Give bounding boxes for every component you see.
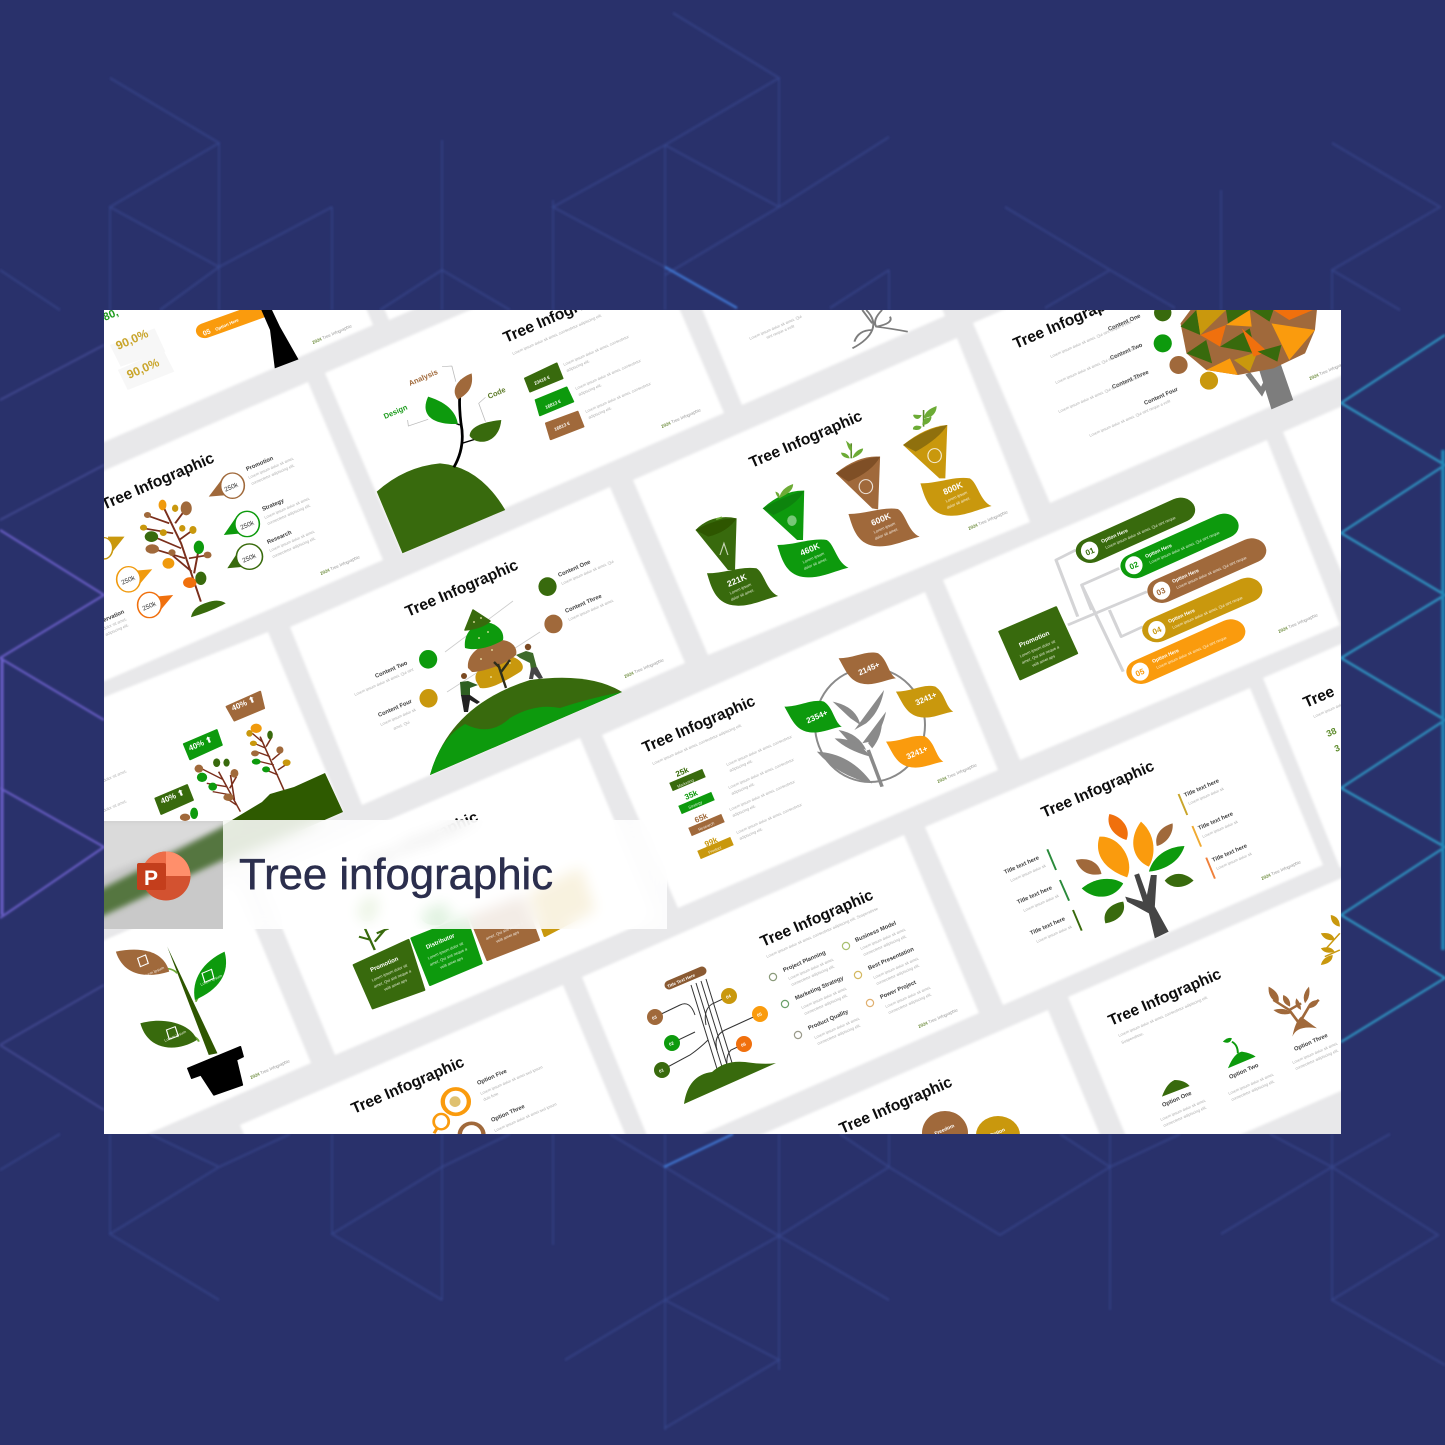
slide: small plants growing with 40% tags: 40% ⬆ <box>159 788 186 806</box>
slide: tree diagram and checklist: 02 <box>668 1040 675 1047</box>
slide: small plants growing with 40% tags: 40% ⬆ <box>187 735 214 753</box>
slide: branching tree with 250k pins: 250k <box>121 574 137 587</box>
slide: tree diagram and checklist: Best Presentation <box>867 946 915 972</box>
slide: circular leaves around a grey plant: Lorem ipsum dolor sit amet, consectetur adipiscing elit. <box>651 722 743 766</box>
slide: two people and tree on a globe: Content Two <box>374 660 409 680</box>
slide: colourful leaf tree: Title text here <box>1003 855 1041 876</box>
slide: promotion flow with five option pills: Lorem ipsum dolor sit <box>1019 638 1057 659</box>
slide: potted plant with three leaves: Lorem Ipsum <box>199 973 223 987</box>
slide: promotion flow with five option pills: 03 <box>1155 586 1167 598</box>
slide: percentage cards and black trunk: 90,0% <box>125 355 162 382</box>
slide: circular leaves around a grey plant: 25k <box>674 765 691 779</box>
slide: low-poly tree with four contents <box>1011 289 1350 438</box>
icon: PowerPoint logo: P <box>144 867 158 890</box>
slide: circular leaves around a grey plant: adipiscing elit. <box>728 758 753 773</box>
slide: promotion and distributor tiles: velit amet aps <box>495 929 520 944</box>
slide: two people and tree on a globe: Content Three <box>564 593 604 615</box>
slide: sapling on a hill: Lorem ipsum dolor sit amet, consectetur <box>574 358 642 391</box>
slide: three stages of plant growth: Lorem ipsum dolor sit amet, <box>1291 1041 1339 1065</box>
slide: tree diagram and checklist: Lorem ipsum dolor sit amet, <box>884 985 932 1009</box>
slide: colourful leaf tree: Lorem ipsum dolor sit <box>1201 819 1239 839</box>
slide: tree diagram and checklist: Product Quality <box>807 1009 850 1032</box>
slide: branching tree with 250k pins: consectetur adipiscing elit. <box>250 463 295 486</box>
slide: low-poly tree with four contents: 2024 Tree Infographic <box>1308 359 1350 381</box>
slide: colourful leaf tree: Lorem ipsum dolor sit <box>1187 786 1225 806</box>
slide: colourful leaf tree: Tree Infographic <box>1039 758 1157 822</box>
slide: colourful leaf tree: Title text here <box>1029 916 1067 937</box>
slide: promotion flow with five option pills: Lorem ipsum dolor sit amet. Qui sint neque <box>1104 515 1177 550</box>
slide: funnels with growing sprouts: Lorem ipsum <box>945 489 969 504</box>
slide: sapling on a hill: 23416 € <box>533 375 551 386</box>
slide: promotion and distributor tiles: Lorem ipsum dolor sit <box>371 962 409 983</box>
slide: colourful leaf tree: Lorem ipsum dolor sit <box>1022 893 1060 913</box>
slide: circular leaves around a grey plant: 99k <box>703 835 720 849</box>
slide: linked option circles: Lorem ipsum dolor sit amet sed ipsum <box>479 1064 544 1096</box>
slide: promotion and distributor tiles: amet. Qui sint neque a <box>485 920 525 941</box>
slide: low-poly tree with four contents: Content Four <box>1143 387 1180 407</box>
slide: tree diagram and checklist: Lorem ipsum dolor sit amet, consectetur adipiscing elit. Suspendisse <box>765 906 879 959</box>
slide: circular leaves around a grey plant: 65k <box>693 811 710 825</box>
slide: promotion flow with five option pills: 2024 Tree Infographic <box>1277 612 1319 634</box>
banner: title: Tree infographic <box>239 850 553 899</box>
slide: partial slide at right edge: 38 <box>1325 726 1338 739</box>
slide: tree diagram and checklist: consectetur adipiscing elit. <box>875 963 920 986</box>
slide: potted plant with three leaves: Lorem Ipsum <box>141 965 165 979</box>
slide: circular leaves around a grey plant: Lorem ipsum dolor sit amet, consectetur <box>725 734 793 767</box>
blurred backdrop <box>104 821 223 929</box>
slide: tree diagram and checklist: 2024 Tree Infographic <box>917 1007 959 1029</box>
slide: circular leaves around a grey plant: Marketing <box>676 777 695 789</box>
slide: colourful leaf tree: Lorem ipsum dolor sit <box>1009 863 1047 883</box>
slide: circular leaves around a grey plant: 2145+ <box>857 660 881 677</box>
slide: tree diagram and checklist: Lorem ipsum dolor sit amet, <box>787 957 835 981</box>
slide: colourful leaf tree: Lorem ipsum dolor sit <box>1215 851 1253 871</box>
slide: promotion flow with five option pills <box>999 510 1319 681</box>
slide: colourful leaf tree: Lorem ipsum dolor sit <box>1035 924 1073 944</box>
slide: promotion and distributor tiles: amet. Qui sint neque a <box>429 946 469 967</box>
slide: colourful leaf tree: Title text here <box>1197 811 1235 832</box>
slide: funnels with growing sprouts: 600K <box>869 510 893 528</box>
slide: promotion flow with five option pills: Lorem ipsum dolor sit amet. Qui sint neque <box>1175 555 1248 590</box>
slide: promotion flow with five option pills: 01 <box>1084 546 1096 558</box>
slide: three stages of plant growth: Lorem ipsum dolor sit amet, <box>1227 1072 1275 1096</box>
slide: tree diagram and checklist: Lorem ipsum dolor sit amet, <box>859 927 907 951</box>
slide: tree diagram and checklist: Lorem ipsum dolor sit amet, <box>813 1016 861 1040</box>
slide: sapling on a hill: Design <box>382 402 409 421</box>
slide: sapling on a hill: adipiscing elit. <box>577 382 602 397</box>
panel: slide collage <box>104 310 1341 1134</box>
slide: branching tree with 250k pins <box>95 450 361 637</box>
slide: partial slide at right edge: 3 <box>1333 743 1341 754</box>
slide: tree diagram and checklist: Power Project <box>879 980 917 1001</box>
slide: percentage cards and black trunk: 05 <box>202 328 212 338</box>
slide: small plants growing with 40% tags: 40% ⬆ <box>230 695 257 713</box>
slide: roots illustration: Lorem ipsum dolor sit amet. Qui <box>748 314 802 341</box>
slide: three stages of plant growth: Option Three <box>1293 1033 1330 1053</box>
slide: circular leaves around a grey plant: adipiscing elit. <box>730 781 755 796</box>
slide: circular leaves around a grey plant: 2024 Tree Infographic <box>936 762 978 784</box>
slide: funnels with growing sprouts: dolor sit amet. <box>803 556 828 571</box>
slide: branching tree with 250k pins: consectetur adipiscing elit. <box>266 503 311 526</box>
slide: promotion and distributor tiles: Promotion <box>370 956 400 974</box>
slide: sapling on a hill: Lorem ipsum dolor sit amet, consectetur adipiscing elit. <box>511 312 603 356</box>
slide: sapling on a hill: 16813 € <box>544 399 562 410</box>
slide: promotion flow with five option pills: Lorem ipsum dolor sit amet. Qui sint neque <box>1148 530 1221 565</box>
slide: tree diagram and checklist: 06 <box>740 1041 747 1048</box>
slide: promotion flow with five option pills: Promotion <box>1018 630 1051 649</box>
slide: promotion flow with five option pills: Option Here <box>1144 543 1173 560</box>
slide: tree diagram and checklist <box>647 887 959 1104</box>
slide: circular leaves around a grey plant: Strategy <box>687 799 703 810</box>
slide: circular leaves around a grey plant <box>640 463 978 855</box>
slide: three stages of plant growth: consectetur adipiscing elit. <box>1162 1105 1207 1128</box>
slide: potted plant with three leaves: 2024 Tree Infographic <box>249 1058 291 1080</box>
slide: colourful leaf tree: Title text here <box>1211 843 1249 864</box>
slide: three stages of plant growth: Suspendisse. <box>1120 1031 1144 1045</box>
slide: funnels with growing sprouts: 2024 Tree Infographic <box>967 509 1009 531</box>
slide: linked option circles <box>350 1059 557 1134</box>
slide: percentage cards and black trunk: 90,0% <box>114 326 151 353</box>
slide: sapling on a hill: 16813 € <box>553 421 571 432</box>
slide: potted plant with three leaves <box>116 947 291 1095</box>
slide: low-poly tree with four contents: Content Three <box>1111 369 1151 391</box>
slide: tree diagram and checklist: Title Text Here <box>666 972 696 989</box>
slide: tree diagram and checklist: Business Model <box>854 921 898 944</box>
slide: three stages of plant growth <box>1106 915 1340 1128</box>
slide: two people and tree on a globe: Lorem ipsum dolor sit amet. Qui <box>560 559 614 586</box>
slide: sapling on a hill: adipiscing elit. <box>565 358 590 373</box>
slide: promotion and distributor tiles: velit amet aps <box>383 977 408 992</box>
slide: two people and tree on a globe: Content Four <box>377 699 414 719</box>
slide: roots illustration <box>748 310 908 348</box>
slide: two people and tree on a globe: Content One <box>557 559 592 579</box>
banner: title <box>223 820 667 929</box>
slide: tree diagram and checklist: consectetur adipiscing elit. <box>816 1023 861 1046</box>
slide: circular leaves around a grey plant: Lorem ipsum dolor sit amet, consectetur <box>735 802 803 835</box>
slide: sapling on a hill: Analysis <box>407 367 439 388</box>
slide: three stages of plant growth: Lorem ipsum dolor sit amet, consectetur adipiscing elit. <box>1117 994 1209 1038</box>
slide: tree diagram and checklist: Tree Infographic <box>758 887 876 951</box>
slide: promotion and distributor tiles: Distributor <box>425 933 456 951</box>
slide: promotion flow with five option pills: Lorem ipsum dolor sit amet. Qui sint neque <box>1171 595 1244 630</box>
slide: two people and tree on a globe: Lorem ipsum dolor sit amet. <box>567 598 615 622</box>
slide: low-poly tree with four contents: Lorem ipsum dolor sit amet. Qui sint neque a velit <box>1049 319 1133 359</box>
slide: funnels with growing sprouts: Lorem ipsum <box>873 520 897 535</box>
slide: promotion flow with five option pills: Option Here <box>1167 608 1196 625</box>
slide: branching tree with 250k pins: Research <box>266 530 293 546</box>
slide: branching tree with 250k pins: Strategy <box>261 498 286 513</box>
slide: promotion flow with five option pills: Option Here <box>1151 648 1180 665</box>
slide: circular leaves around a grey plant: Lorem ipsum dolor sit amet, consectetur <box>727 757 795 790</box>
slide: circular leaves around a grey plant: Tree Infographic <box>640 693 758 757</box>
slide: branching tree with 250k pins: 2024 Tree Infographic <box>319 554 361 576</box>
slide: three stages of plant growth: consectetur adipiscing elit. <box>1294 1048 1339 1071</box>
slide: small plants growing with 40% tags: dolor sit amet, <box>102 768 127 783</box>
slide: funnels with growing sprouts <box>695 406 1009 606</box>
slide: partial slide at right edge <box>1302 688 1341 752</box>
slide: branching tree with 250k pins: Tree Infographic <box>99 450 217 514</box>
slide: promotion and distributor tiles <box>354 809 594 1008</box>
slide: two people and tree on a globe: amet. Qui <box>392 719 410 731</box>
slide: promotion and distributor tiles: Tree Infographic <box>363 809 481 873</box>
slide: branching tree with 250k pins: 250k <box>142 600 158 613</box>
slide: branching tree with 250k pins: Lorem ipsum dolor sit amet, <box>268 529 316 553</box>
slide: tree diagram and checklist: Lorem ipsum dolor sit amet, <box>800 986 848 1010</box>
slide: low-poly tree with four contents: Lorem ipsum dolor sit amet. Qui sint neque a velit <box>1057 374 1141 414</box>
slide: low-poly tree with four contents: Content Two <box>1109 342 1144 362</box>
slide: circular leaves around a grey plant: 3241+ <box>905 744 929 761</box>
slide: circular leaves around a grey plant: adipiscing elit. <box>731 803 756 818</box>
slide: tree diagram and checklist: Lorem ipsum dolor sit amet, <box>872 956 920 980</box>
slide: circular leaves around a grey plant: Product <box>707 844 723 855</box>
slide: funnels with growing sprouts: 800K <box>941 479 965 497</box>
slide: branching tree with 250k pins: ervation <box>102 609 126 624</box>
slide: colourful leaf tree <box>1003 758 1302 944</box>
slide: bottom title with circles: Option <box>989 1127 1006 1139</box>
slide: funnels with growing sprouts: dolor sit amet. <box>946 495 971 510</box>
slide: promotion flow with five option pills: 04 <box>1151 625 1163 637</box>
slide: tree diagram and checklist: 01 <box>658 1067 665 1074</box>
slide: promotion flow with five option pills: amet. Qui sint neque a <box>1021 644 1061 665</box>
slide: promotion and distributor tiles: amet. Qui sint neque a <box>373 968 413 989</box>
slide: promotion flow with five option pills: Lorem ipsum dolor sit amet. Qui sint neque <box>1155 635 1228 670</box>
slide: two people and tree on a globe: Lorem ipsum dolor sit <box>379 707 417 727</box>
slide: low-poly tree with four contents: Lorem ipsum dolor sit amet. Qui sint neque a velit <box>1054 345 1138 385</box>
slide: funnels with growing sprouts: dolor sit amet. <box>874 526 899 541</box>
slide: tree diagram and checklist: consectetur adipiscing elit. <box>862 934 907 957</box>
slide: low-poly tree with four contents: Lorem ipsum dolor sit amet. Qui sint neque a velit <box>1088 398 1172 438</box>
slide: branching tree with 250k pins: Lorem ipsum dolor sit amet, <box>263 496 311 520</box>
slide: three stages of plant growth: Option Two <box>1228 1063 1260 1081</box>
slide: branching tree with 250k pins: 250k <box>242 552 258 565</box>
slide: branching tree with 250k pins: adipiscing elit. <box>104 622 129 637</box>
slide: tree diagram and checklist: 04 <box>725 993 732 1000</box>
slide: funnels with growing sprouts: dolor sit amet. <box>730 587 755 602</box>
slide: branching tree with 250k pins: 250k <box>224 481 240 494</box>
slide: bottom title with circles: Freedom <box>934 1123 956 1137</box>
slide: linked option circles: Option Five <box>476 1068 509 1087</box>
slide: low-poly tree with four contents: Tree Infographic <box>1011 289 1129 353</box>
slide: sapling on a hill: 2024 Tree Infographic <box>660 407 702 429</box>
slide: branching tree with 250k pins: Lorem ipsum dolor sit amet, <box>247 456 295 480</box>
slide: small plants growing with 40% tags: dolor sit amet, <box>102 798 127 813</box>
slide: sapling on a hill: Lorem ipsum dolor sit amet, consectetur <box>584 381 652 414</box>
banner: icon strip with PowerPoint logo <box>104 821 223 929</box>
icon: PowerPoint logo <box>137 852 190 900</box>
slide: two people and tree on a globe: Tree Infographic <box>403 557 521 621</box>
slide: three stages of plant growth: Option One <box>1161 1090 1193 1109</box>
slide: roots illustration: sint neque a velit <box>765 323 796 340</box>
slide: low-poly tree with four contents: Content One <box>1107 313 1142 333</box>
slide: funnels with growing sprouts: Lorem ipsum <box>729 581 753 596</box>
slide: branching tree with 250k pins: 250k <box>240 519 256 532</box>
slide: tree diagram and checklist: 03 <box>651 1014 658 1021</box>
slide: tree diagram and checklist: Project Planning <box>782 950 827 974</box>
slide: partial slide at right edge: Tree <box>1301 683 1337 712</box>
slide: percentage cards and black trunk: 2024 Tree Infographic <box>311 323 353 345</box>
slide: colourful leaf tree: 2024 Tree Infographic <box>1260 859 1302 881</box>
slide: tree diagram and checklist: Marketing Strategy <box>794 975 845 1002</box>
slide: three stages of plant growth: Tree Infographic <box>1106 966 1224 1030</box>
slide: tree diagram and checklist: consectetur adipiscing elit. <box>790 964 835 987</box>
slide: funnels with growing sprouts: Tree Infographic <box>747 408 865 472</box>
slide: linked option circles: duis fuse <box>482 1091 500 1102</box>
slide: branching tree with 250k pins: dolor sit amet, <box>102 616 127 631</box>
slide: three stages of plant growth: Lorem ipsum dolor sit amet, <box>1159 1098 1207 1122</box>
slide: colourful leaf tree: Title text here <box>1183 778 1221 799</box>
slide: funnels with growing sprouts: 221K <box>725 571 749 589</box>
slide: promotion flow with five option pills: Option Here <box>1171 568 1200 585</box>
slide: circular leaves around a grey plant: Lorem ipsum dolor sit amet, consectetur <box>728 779 796 812</box>
slide: partial slide at right edge: Lorem ipsum dolor <box>1312 701 1345 719</box>
slide: potted plant with three leaves: Lorem Ipsum <box>163 1029 187 1043</box>
slide: funnels with growing sprouts: Lorem ipsum <box>802 550 826 565</box>
slide: branching tree with 250k pins: Promotion <box>245 456 275 473</box>
slide: promotion flow with five option pills: velit amet aps <box>1031 653 1056 668</box>
slide: circular leaves around a grey plant: Research <box>697 821 715 832</box>
slide: tree diagram and checklist: 05 <box>756 1011 763 1018</box>
slide: linked option circles: Tree Infographic <box>349 1054 467 1118</box>
slide: percentage cards and black trunk: Option Here <box>214 317 240 332</box>
slide: sapling on a hill: Tree Infographic <box>501 283 619 347</box>
slide: circular leaves around a grey plant: 3241+ <box>914 690 938 707</box>
slide: percentage cards and black trunk: 80, <box>101 307 120 324</box>
slide: small plants growing with 40% tags <box>104 690 343 864</box>
slide: promotion and distributor tiles: velit amet aps <box>439 955 464 970</box>
slide: circular leaves around a grey plant: 2354+ <box>805 708 829 725</box>
slide: promotion flow with five option pills: 02 <box>1128 560 1140 572</box>
slide: colourful leaf tree: Title text here <box>1016 885 1054 906</box>
slide: circular leaves around a grey plant: adipiscing elit. <box>738 826 763 841</box>
slide: sapling on a hill <box>376 310 701 554</box>
slide: tree diagram and checklist: consectetur adipiscing elit. <box>887 992 932 1015</box>
slide: sapling on a hill: Lorem ipsum dolor sit amet, consectetur <box>562 334 630 367</box>
slide: promotion flow with five option pills: 05 <box>1134 667 1146 679</box>
slide: tree diagram and checklist: consectetur adipiscing elit. <box>803 993 848 1016</box>
slide: sapling on a hill: Code <box>486 385 507 401</box>
slide: funnels with growing sprouts: 460K <box>798 540 822 558</box>
slide: sapling on a hill: adipiscing elit. <box>587 405 612 420</box>
slide: two people and tree on a globe: Lorem ipsum dolor sit amet. Qui sint <box>353 666 415 697</box>
slide: promotion and distributor tiles: Lorem ipsum dolor sit <box>427 940 465 961</box>
slide: bottom title with circles: Tree Infographic <box>837 1074 955 1138</box>
slide: circular leaves around a grey plant: 35k <box>683 788 700 802</box>
slide: linked option circles: Lorem ipsum dolor sit amet sed ipsum <box>493 1101 558 1133</box>
slide: two people and tree on a globe: 2024 Tree Infographic <box>623 657 665 679</box>
slide: linked option circles: Option Three <box>490 1104 527 1124</box>
slide: promotion flow with five option pills: Option Here <box>1100 528 1129 545</box>
slide: three stages of plant growth: consectetur adipiscing elit. <box>1230 1079 1275 1102</box>
slide: two people and tree on a globe <box>353 557 665 775</box>
slide: bottom title with circles <box>838 1079 1020 1134</box>
slide: percentage cards and black trunk <box>104 310 352 378</box>
slide: branching tree with 250k pins: consectetur adipiscing elit. <box>271 536 316 559</box>
